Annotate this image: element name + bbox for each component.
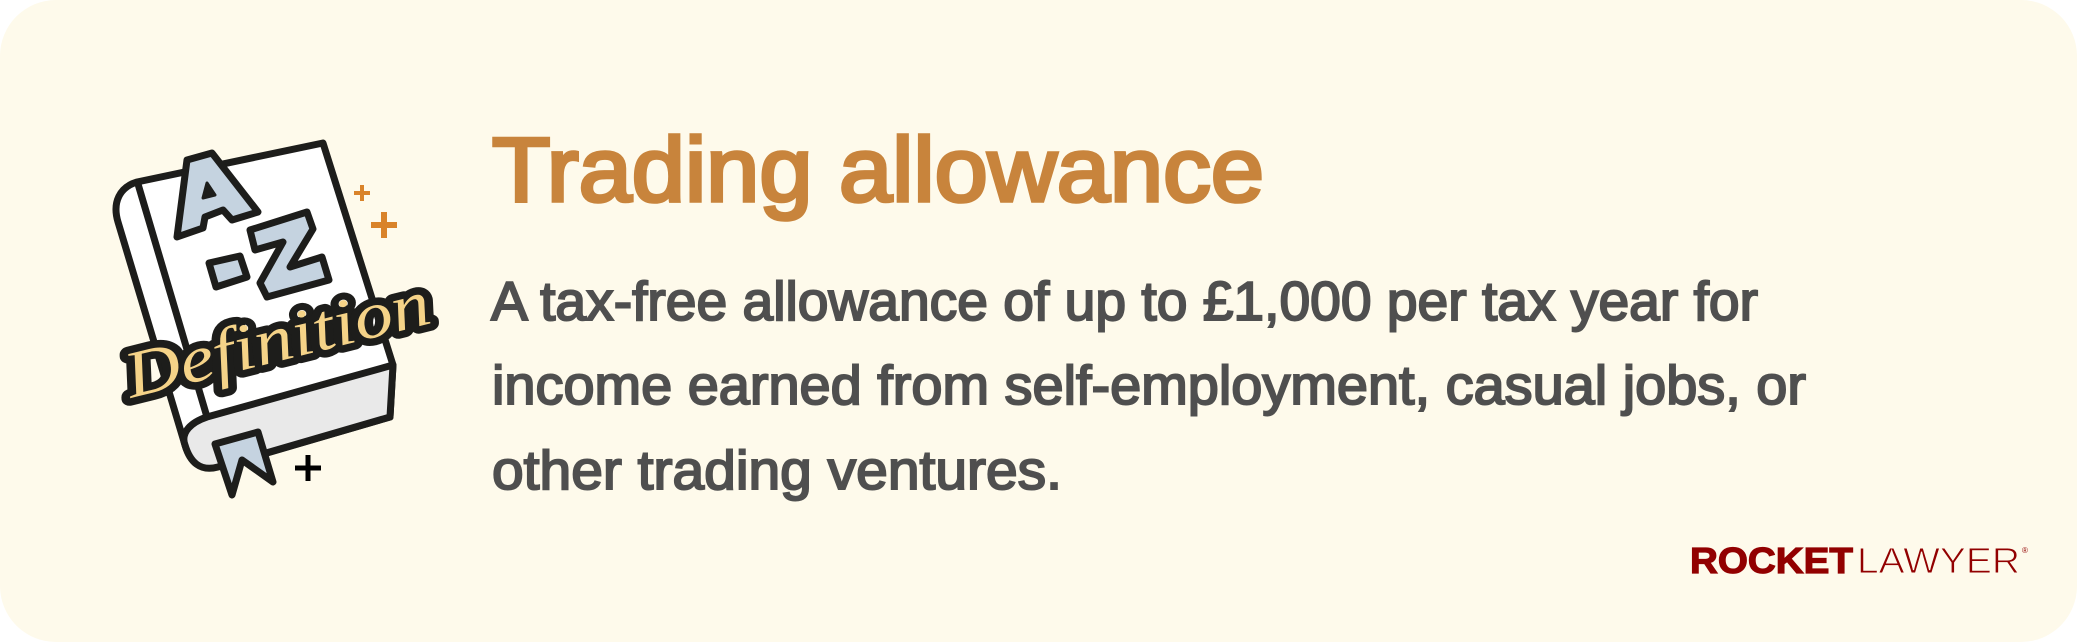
dash between letters (209, 256, 247, 287)
letter Z (250, 212, 329, 297)
book page edge (184, 365, 393, 468)
icon: definition book (116, 143, 437, 495)
logo: Rocket Lawyer: ® (2022, 546, 2028, 555)
definition script label: Definition (116, 266, 437, 413)
orange sparkle large (371, 212, 397, 238)
logo: Rocket Lawyer: ROCKET (1690, 540, 1853, 581)
letter A (177, 153, 258, 237)
book spine line (138, 184, 207, 417)
title: Trading allowance (492, 120, 1264, 221)
black sparkle (295, 455, 321, 481)
definition text: A tax-free allowance of up to £1,000 per tax year for (491, 270, 1758, 332)
definition text: other trading ventures. (492, 439, 1062, 501)
definition text (491, 270, 1806, 501)
bookmark (215, 432, 273, 495)
letter A counter (203, 183, 215, 198)
logo: Rocket Lawyer (1690, 540, 2028, 581)
definition text: income earned from self-employment, casual jobs, or (492, 354, 1806, 416)
logo: Rocket Lawyer: LAWYER (1857, 540, 2020, 581)
orange sparkle small (354, 185, 370, 201)
book cover (116, 143, 393, 468)
